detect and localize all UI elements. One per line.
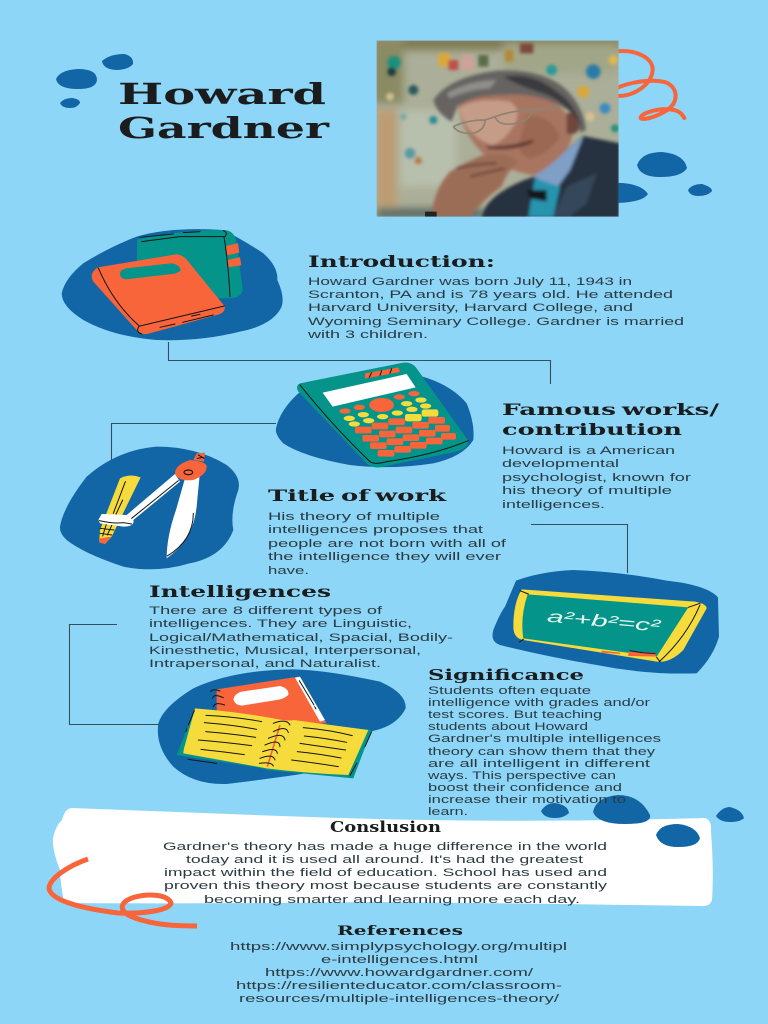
section: title of work: have.	[268, 565, 309, 577]
text: conclusion: proven this theory most because students are constantly	[164, 880, 608, 892]
text: conclusion: becoming smarter and learning more each day.	[204, 894, 580, 906]
section: title of work: Title of work	[268, 486, 447, 505]
section: famous works: developmental	[502, 458, 619, 470]
section: title of work: the intelligence they will ever	[268, 551, 502, 563]
text: conclusion: impact within the field of education. School has used and	[164, 867, 607, 879]
orange book	[92, 254, 225, 334]
blob	[492, 570, 719, 674]
shirt and tie	[533, 137, 583, 188]
section: references: https://resilienteducator.com/classroom-	[236, 980, 563, 992]
section: significance: students about Howard	[428, 721, 588, 733]
section: title of work: intelligences proposes that	[268, 524, 483, 536]
section: significance: Gardner's multiple intelligences	[428, 733, 661, 745]
section: famous works: Famous works/	[502, 400, 719, 419]
section: famous works: his theory of multiple	[502, 485, 672, 497]
blob	[60, 447, 239, 569]
section: significance: increase their motivation to	[428, 794, 626, 806]
section: references: resources/multiple-intelligences-theory/	[239, 993, 559, 1005]
decorative blobs: bottom right	[541, 795, 744, 847]
section: significance: theory can show them that they	[428, 746, 656, 758]
orange squiggle: top right	[617, 51, 684, 119]
section: intelligences: Logical/Mathematical, Spacial, Bodily-	[149, 632, 454, 644]
text: conclusion	[163, 841, 608, 906]
section: introduction	[306, 252, 684, 341]
compass head	[175, 460, 207, 480]
section: introduction: Harvard University, Harvard College, and	[308, 302, 633, 314]
glasses	[453, 107, 560, 133]
connector: intro to famous works	[168, 342, 550, 384]
icon: books	[62, 229, 283, 340]
section: references	[230, 924, 567, 1005]
title: Howard	[118, 77, 326, 111]
section: significance: ways. This perspective can	[427, 770, 616, 782]
keys	[369, 398, 394, 412]
section: references: https://www.howardgardner.com/	[265, 967, 533, 979]
text: conclusion: today and it is used all around. It's had the greatest	[186, 854, 583, 866]
section: intelligences: There are 8 different types of	[149, 605, 382, 617]
section: intelligences: Intelligences	[149, 582, 331, 601]
title: Gardner	[118, 111, 330, 145]
section: significance	[427, 666, 661, 818]
chalk tray	[628, 652, 656, 657]
section: references: https://www.simplypsychology.org/multipl	[230, 941, 567, 953]
section: significance: test scores. But teaching	[428, 709, 602, 721]
section: significance: are all intelligent in different	[428, 758, 650, 770]
section: significance: learn.	[428, 806, 468, 818]
formula: a²+b²=c²	[546, 607, 663, 636]
section: title of work: His theory of multiple	[268, 511, 440, 523]
decorative blobs: top left	[56, 54, 133, 108]
section: introduction: Introduction:	[308, 252, 495, 271]
section: intelligences: Intrapersonal, and Naturalist.	[149, 658, 381, 670]
text: conclusion: Gardner's theory has made a huge difference in the world	[163, 841, 607, 853]
blob	[158, 669, 406, 784]
section: references: e-intelligences.html	[321, 954, 478, 966]
top slots	[365, 367, 400, 379]
section: famous works: psychologist, known for	[502, 472, 692, 484]
section: famous works: contribution	[502, 420, 683, 439]
section: introduction: Howard Gardner was born July 11, 1943 in	[308, 276, 632, 288]
orange squiggle: bottom left	[49, 859, 197, 926]
green book	[137, 230, 243, 298]
compass arm	[98, 474, 180, 527]
icon: compass and pencil	[60, 447, 239, 569]
notebook spread	[177, 713, 372, 778]
connector: title of work to chalkboard	[531, 524, 628, 573]
back notebook	[217, 677, 327, 723]
blob	[62, 229, 283, 340]
section: significance: boost their confidence and	[428, 782, 622, 794]
title	[118, 77, 330, 145]
section: references: References	[337, 924, 463, 939]
icon: calculator	[276, 363, 474, 467]
icon: chalkboard	[492, 570, 719, 674]
hand	[432, 154, 518, 217]
section: intelligences	[149, 582, 454, 670]
blob	[276, 373, 474, 467]
pencil	[99, 476, 141, 544]
screen	[323, 374, 416, 407]
frame	[513, 589, 707, 662]
section: significance: Students often equate	[428, 685, 591, 697]
section: famous works: intelligences.	[502, 499, 605, 511]
section: intelligences: intelligences. They are Linguistic,	[149, 618, 412, 630]
body	[297, 363, 468, 467]
connector: calculator to compass	[112, 424, 276, 462]
icon: notebooks	[158, 669, 406, 784]
section: famous works: Howard is a American	[502, 445, 675, 457]
section: introduction: with 3 children.	[306, 329, 428, 341]
section: title of work: people are not born with all of	[268, 538, 506, 550]
section: introduction: Scranton, PA and is 78 years old. He attended	[308, 289, 673, 301]
heading: conclusion: Conslusion	[330, 818, 441, 836]
photo of Howard Gardner	[373, 37, 620, 218]
board	[522, 594, 688, 657]
decorative blobs: right of photo	[612, 152, 712, 203]
section: significance: Significance	[428, 666, 584, 684]
suit	[482, 136, 620, 218]
hair	[433, 70, 586, 133]
section: title of work	[268, 486, 506, 577]
section: significance: intelligence with grades and/or	[428, 697, 651, 709]
connector: intelligences to notebook	[70, 624, 160, 724]
section: introduction: Wyoming Seminary College. Gardner is married	[308, 316, 684, 328]
panel: conclusion	[53, 808, 713, 906]
section: intelligences: Kinesthetic, Musical, Interpersonal,	[149, 645, 421, 657]
section: famous works	[502, 400, 719, 511]
neck and face	[457, 92, 573, 175]
